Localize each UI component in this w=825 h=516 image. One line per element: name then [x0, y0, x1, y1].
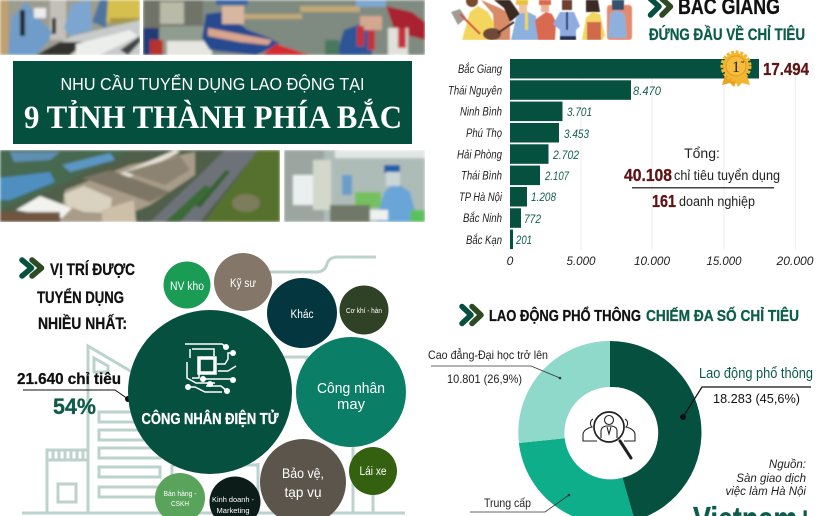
background: building outline	[22, 257, 405, 513]
overalls woman	[582, 12, 605, 40]
bar chart: Ninh Bình	[460, 106, 502, 118]
totals callout	[624, 145, 780, 211]
bubble: NV kho: NV kho	[170, 281, 204, 293]
bubble: Cơ khí - hàn	[340, 286, 388, 334]
bubble: Khác: Khác	[290, 309, 314, 321]
bar chart: 5.000	[566, 254, 596, 268]
icon: people with magnifier	[583, 412, 635, 458]
bubble: Bảo vệ, tạp vụ: Bảo vệ,	[282, 465, 324, 481]
icon: gold medal	[722, 52, 750, 87]
photo: workers at assembly line	[0, 0, 140, 55]
bubble: Công nhân điện tử: CÔNG NHÂN ĐIỆN TỬ	[142, 409, 279, 428]
title banner	[13, 61, 412, 144]
heading: positions: NHIỀU NHẤT:	[38, 314, 127, 333]
heading: positions	[22, 260, 135, 333]
source note: việc làm Hà Nội	[725, 486, 806, 498]
bubble: Bảo vệ, tạp vụ: tạp vụ	[284, 484, 322, 500]
heading: positions: TUYỂN DỤNG	[37, 288, 124, 307]
icon: double chevron	[462, 306, 481, 324]
bubble: Kỹ sư	[214, 253, 272, 311]
bubble: Bán hàng - CSKH: CSKH	[171, 501, 189, 508]
donut label: Lao động phổ thông	[680, 366, 813, 420]
bar chart: 201	[515, 233, 532, 247]
bubble: Kinh doanh - Marketing	[210, 476, 260, 516]
donut label: Cao đẳng - Đại học: 10.801 (26,9%)	[447, 372, 522, 386]
donut label: Cao đẳng - Đại học: Cao đẳng-Đại học trở lên	[428, 347, 548, 362]
illustration: group of workers	[451, 0, 632, 40]
icon: gold medal: st	[741, 59, 745, 64]
left worker	[462, 6, 497, 40]
photo: factory worker in blue cap	[284, 150, 425, 222]
source note	[725, 459, 806, 498]
bubble: Công nhân may	[296, 337, 406, 447]
bubble: Cơ khí - hàn: Cơ khí - hàn	[346, 308, 382, 315]
totals callout: 40.108	[624, 165, 672, 185]
bar chart	[448, 59, 814, 268]
totals callout: chỉ tiêu tuyển dụng	[674, 168, 780, 183]
icon: circuit chip	[185, 344, 236, 394]
bar chart: 3.701	[567, 105, 592, 119]
bar chart: TP Hà Nội	[459, 192, 502, 204]
bubble: Khác	[267, 278, 337, 348]
heading: Bắc Giang	[649, 0, 805, 44]
totals callout: doanh nghiệp	[679, 194, 755, 209]
bar chart: Thái Bình	[461, 170, 502, 182]
source note: Sàn giao dịch	[736, 473, 806, 485]
bar chart: 2.702	[552, 148, 579, 162]
bar chart: Thái Nguyên	[448, 86, 502, 98]
hard-hat worker	[511, 10, 538, 40]
bar chart: 20.000	[775, 254, 814, 268]
source note: Nguồn:	[769, 459, 806, 471]
bar chart: 3.453	[564, 127, 589, 141]
bubble: Bảo vệ, tạp vụ	[260, 439, 346, 516]
bar chart: Bắc Ninh	[463, 212, 502, 225]
heading: Lao động phổ thông	[462, 305, 799, 325]
bubble: Bán hàng - CSKH: Bán hàng -	[164, 491, 197, 498]
title banner: NHU CẦU TUYỂN DỤNG LAO ĐỘNG TẠI	[60, 73, 364, 94]
icon: gold medal: 1	[732, 59, 740, 76]
heading: positions: VỊ TRÍ ĐƯỢC	[50, 260, 135, 279]
bar chart: 10.000	[634, 254, 670, 268]
bar chart: 2.107	[544, 169, 570, 183]
bar chart: 1.208	[531, 190, 556, 204]
callout: 21.640 chỉ tiêu: 21.640 chỉ tiêu	[17, 371, 121, 388]
bubble: Công nhân may: Công nhân	[317, 380, 385, 397]
bubble: Kỹ sư: Kỹ sư	[230, 278, 256, 290]
bar chart: Phú Thọ	[466, 128, 502, 140]
bar chart: 8.470	[633, 84, 661, 98]
icon: double chevron	[22, 260, 42, 276]
bubble: Lái xe: Lái xe	[360, 466, 386, 478]
bubble: Lái xe	[349, 447, 397, 495]
bar chart: 772	[524, 212, 541, 226]
donut label: Cao đẳng - Đại học	[428, 347, 561, 386]
mask worker	[608, 10, 627, 38]
heading: Lao động phổ thông: CHIẾM ĐA SỐ CHỈ TIÊU	[646, 305, 799, 325]
donut chart	[518, 341, 701, 516]
bar chart: 17.494	[763, 59, 809, 79]
police officer	[553, 12, 580, 40]
callout: 21.640 chỉ tiêu: 54%	[53, 394, 96, 419]
bar chart: 0	[507, 254, 514, 268]
photo: aerial industrial park	[0, 150, 280, 222]
bubble: Công nhân may: may	[337, 396, 365, 413]
bubble: NV kho	[164, 262, 210, 308]
bubble: Kinh doanh - Marketing: Kinh doanh -	[212, 495, 254, 504]
bar chart: Bắc Kạn	[466, 234, 502, 247]
donut label: Trung cấp	[470, 494, 570, 512]
bar chart: Bắc Giang	[458, 63, 502, 76]
icon: double chevron	[650, 0, 670, 15]
donut label: Lao động phổ thông: 18.283 (45,6%)	[713, 391, 800, 406]
donut label: Lao động phổ thông: Lao động phổ thông	[699, 366, 813, 382]
photo: garment workers sewing	[143, 0, 425, 55]
bar chart: 15.000	[706, 254, 742, 268]
bubble: Kinh doanh - Marketing: Marketing	[216, 506, 250, 515]
donut label: Trung cấp: Trung cấp	[484, 496, 531, 510]
bubble: Công nhân điện tử	[128, 310, 292, 474]
bubble: Bán hàng - CSKH	[155, 473, 205, 516]
heading: Lao động phổ thông: LAO ĐỘNG PHỔ THÔNG	[489, 306, 641, 325]
mask worker panel	[607, 5, 632, 40]
title banner: 9 TỈNH THÀNH PHÍA BẮC	[24, 97, 402, 136]
guitar woman	[481, 0, 510, 40]
red shirt worker	[535, 12, 556, 40]
totals callout: 161	[652, 191, 676, 211]
bar chart: Hải Phòng	[457, 150, 502, 162]
callout: 21.640 chỉ tiêu	[17, 371, 131, 419]
totals callout: Tổng:	[684, 145, 720, 161]
